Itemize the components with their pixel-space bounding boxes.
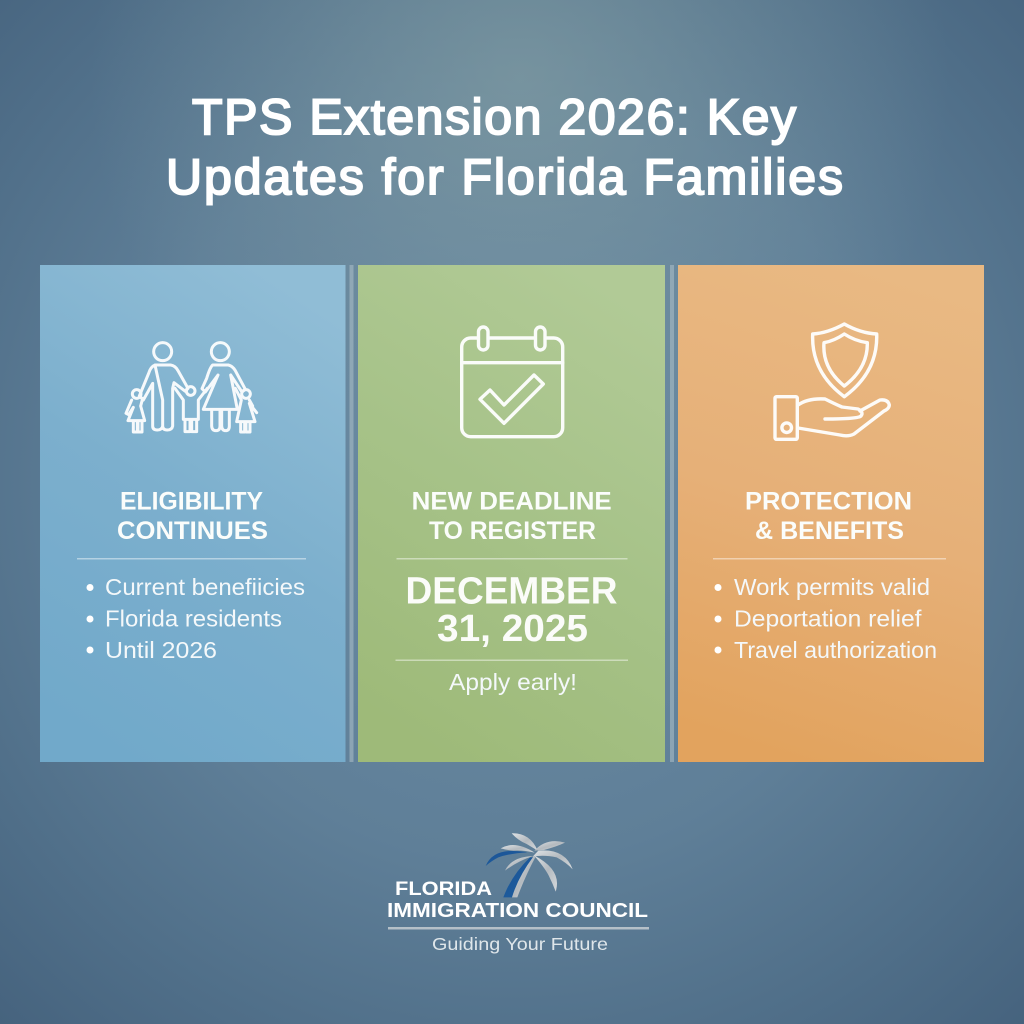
icon: shield over hand [775,324,889,439]
heading: PROTECTION [745,488,912,516]
divider: right [670,265,674,762]
panel background: orange [678,265,984,762]
bullet list: Travel authorization [734,637,937,663]
deadline date: DECEMBER [406,570,618,612]
icon: family [126,343,257,432]
heading: & BENEFITS [755,517,904,545]
icon: palm tree [486,833,573,897]
heading: CONTINUES [117,517,268,545]
heading [117,488,268,545]
heading: ELIGIBILITY [120,488,263,516]
heading [745,488,912,545]
panel: protection and benefits [678,265,984,762]
panel background: green [358,265,665,762]
bullet list [86,574,305,663]
bullet list: Work permits valid [734,574,930,600]
deadline date [406,570,618,650]
panel: new deadline [358,265,665,762]
icon: calendar with check [462,327,563,437]
logo: Florida Immigration Council [387,833,649,954]
logo name: FLORIDA [395,878,492,900]
title: Updates for Florida Families [166,149,843,205]
bullet list: Deportation relief [734,606,922,632]
panel: eligibility continues [40,265,346,762]
heading [412,488,612,545]
bullet list: Current benefiicies [105,574,305,600]
deadline date: 31, 2025 [437,608,588,650]
heading: TO REGISTER [429,517,596,545]
title [166,89,843,205]
heading: NEW DEADLINE [412,488,612,516]
logo name [387,878,648,922]
bullet list [714,574,937,663]
divider: left [350,265,354,762]
title: TPS Extension 2026: Key [192,89,796,145]
bullet list: Florida residents [105,606,282,632]
panel background: blue [40,265,346,762]
note: Apply early! [449,669,577,695]
tagline: Guiding Your Future [432,934,608,954]
bullet list: Until 2026 [105,637,217,663]
logo name: IMMIGRATION COUNCIL [387,900,648,922]
